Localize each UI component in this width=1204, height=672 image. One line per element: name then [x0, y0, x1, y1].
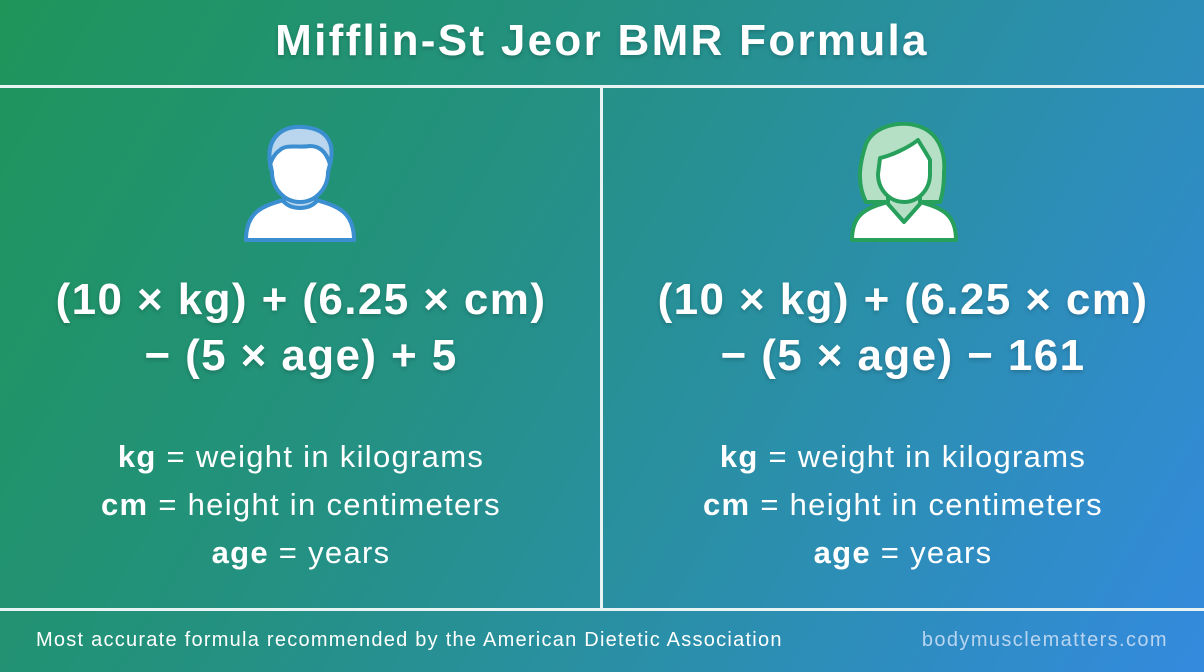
definitions: male: kg = weight in kilograms: [118, 439, 484, 474]
formula: female: [658, 275, 1148, 382]
formula: male: (10 × kg) + (6.25 × cm): [56, 275, 546, 324]
definitions: female: [703, 439, 1103, 570]
formula: male: [56, 275, 546, 382]
definitions: male: cm = height in centimeters: [101, 487, 501, 522]
footer site: bodymusclematters.com: [922, 629, 1168, 651]
formula: male: − (5 × age) + 5: [144, 331, 458, 380]
footer note: Most accurate formula recommended by the American Dietetic Association: [36, 629, 783, 651]
panel: female: [658, 122, 1148, 570]
formula: female: (10 × kg) + (6.25 × cm): [658, 275, 1148, 324]
icon: woman: [850, 122, 958, 242]
definitions: female: cm = height in centimeters: [703, 487, 1103, 522]
definitions: male: [101, 439, 501, 570]
title: Mifflin-St Jeor BMR Formula: [275, 16, 929, 65]
definitions: female: age = years: [814, 535, 992, 570]
definitions: female: kg = weight in kilograms: [720, 439, 1086, 474]
definitions: male: age = years: [212, 535, 390, 570]
icon: man: [244, 124, 356, 242]
panel: male: [56, 124, 546, 570]
formula: female: − (5 × age) − 161: [720, 331, 1086, 380]
